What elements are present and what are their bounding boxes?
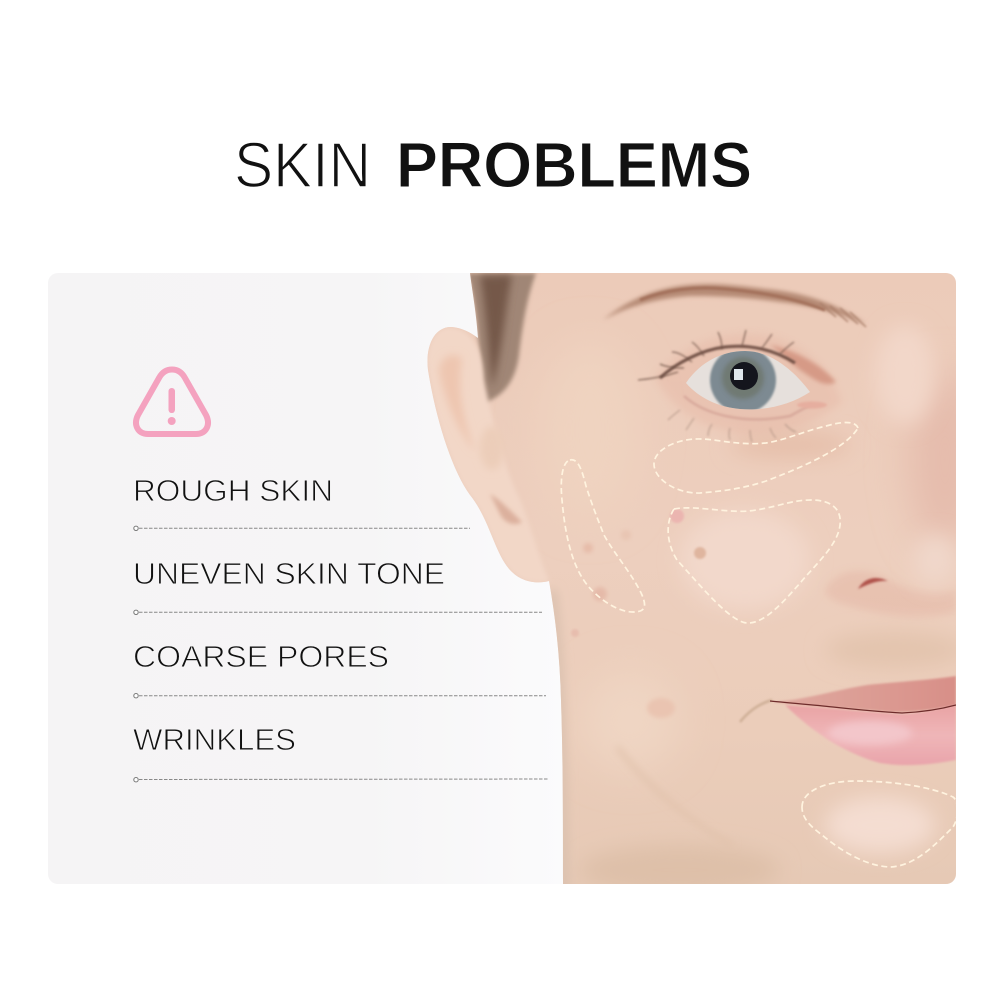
tear duct [797, 402, 827, 408]
upper lashes [638, 330, 794, 380]
list item: uneven skin tone: UNEVEN SKIN TONE [133, 556, 445, 591]
ear [427, 327, 549, 582]
iris [710, 347, 776, 413]
crease at mouth corner [740, 700, 772, 722]
nose [825, 535, 957, 617]
list item: wrinkles: WRINKLES [133, 722, 296, 757]
list item: uneven skin tone [133, 563, 542, 615]
panel: skin problems photo card [48, 273, 980, 900]
pupil [730, 362, 758, 390]
mouth line [770, 701, 956, 713]
list item: wrinkles [133, 729, 548, 782]
list: skin problems [133, 473, 549, 782]
lower lashes [668, 410, 796, 442]
dashed zone: side of face [561, 460, 645, 612]
hair [468, 273, 536, 404]
icon: warning triangle [136, 370, 208, 434]
catchlight [734, 369, 743, 380]
skin shading [550, 330, 956, 884]
dashed zone: chin [802, 781, 958, 867]
dashed zone: cheek triangle [668, 500, 840, 623]
list item: rough skin [133, 480, 470, 531]
list item: rough skin: ROUGH SKIN [133, 473, 333, 508]
upper lip [772, 676, 956, 712]
lower lip [785, 705, 956, 765]
eyelid shading [660, 337, 836, 428]
title word: PROBLEMS: PROBLEMS [396, 129, 752, 201]
panel background [48, 273, 432, 884]
blemishes [571, 509, 706, 718]
lower lash line [684, 396, 812, 419]
eye [638, 330, 842, 442]
outer eyelid pink [770, 345, 836, 384]
lips [740, 676, 956, 765]
dashed zone: under eye [654, 422, 858, 493]
sclera [686, 351, 810, 409]
title [234, 129, 752, 201]
upper lash line [660, 346, 795, 378]
photo: face close-up [420, 273, 980, 900]
list item: coarse pores [133, 646, 546, 698]
list item: coarse pores: COARSE PORES [133, 639, 389, 674]
title word: SKIN: SKIN [234, 129, 371, 201]
skin base [420, 273, 960, 884]
eyebrow [603, 284, 866, 327]
